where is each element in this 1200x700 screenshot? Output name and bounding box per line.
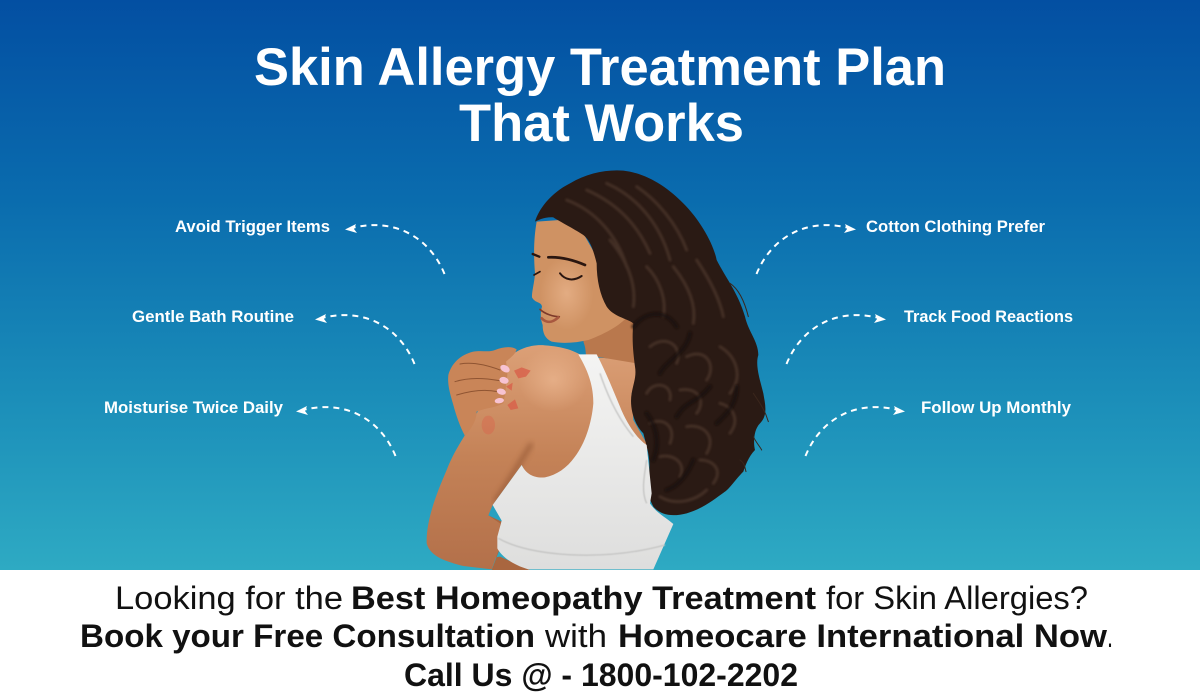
tip: avoid trigger items: Avoid Trigger Items [175,217,330,236]
title: Skin Allergy Treatment Plan [254,38,946,97]
brow, eye and mouth [533,254,585,322]
hair wisps [730,283,768,472]
footer line 2: with [544,618,607,654]
arrow: to moisturise twice daily [296,406,396,456]
photo: woman scratching rash on shoulder [427,170,768,570]
tank shadow folds [498,373,665,555]
shoulder highlight [518,348,588,412]
title: That Works [459,94,744,153]
footer panel [0,570,1200,700]
hair sheen [567,183,737,502]
footer line 2: . [1107,618,1113,654]
neck [583,307,637,363]
tank top [493,354,673,569]
hidden forearm and torso skin [453,515,530,570]
hair [535,170,768,515]
arm shadow [495,443,532,502]
footer line 1: Looking for the [115,580,343,616]
arrow: to cotton clothing prefer [756,224,856,274]
arrow: to avoid trigger items [345,224,444,274]
arrow: to track food reactions [786,314,886,364]
footer line 1 [115,580,1088,616]
back and arm [427,345,648,569]
tip: track food reactions: Track Food Reactions [904,307,1073,326]
footer line 3: phone: Call Us @ - 1800-102-2202 [404,657,798,693]
finger lines [455,363,500,395]
tip: moisturise twice daily: Moisturise Twice Daily [104,398,284,417]
title [254,38,946,153]
footer line 2: Book your Free Consultation [80,618,535,654]
nails [494,363,511,404]
arrow: to follow up monthly [806,406,905,456]
face [532,220,628,343]
hair dark curl shadows [633,314,737,490]
tip: cotton clothing prefer: Cotton Clothing Prefer [866,217,1045,236]
arrow: to gentle bath routine [315,314,414,364]
footer line 2 [80,618,1113,654]
hand [448,347,517,436]
face highlight [540,257,593,330]
footer line 1: for Skin Allergies? [826,580,1088,616]
tip: follow up monthly: Follow Up Monthly [921,398,1072,417]
tip: gentle bath routine: Gentle Bath Routine [132,307,294,326]
arrows left [296,224,444,456]
rash patches [482,367,531,434]
footer line 2: Homeocare International Now [618,618,1107,654]
right tips [866,217,1073,417]
footer line 1: Best Homeopathy Treatment [351,580,816,616]
left tips [104,217,330,417]
arrows right [756,224,905,456]
